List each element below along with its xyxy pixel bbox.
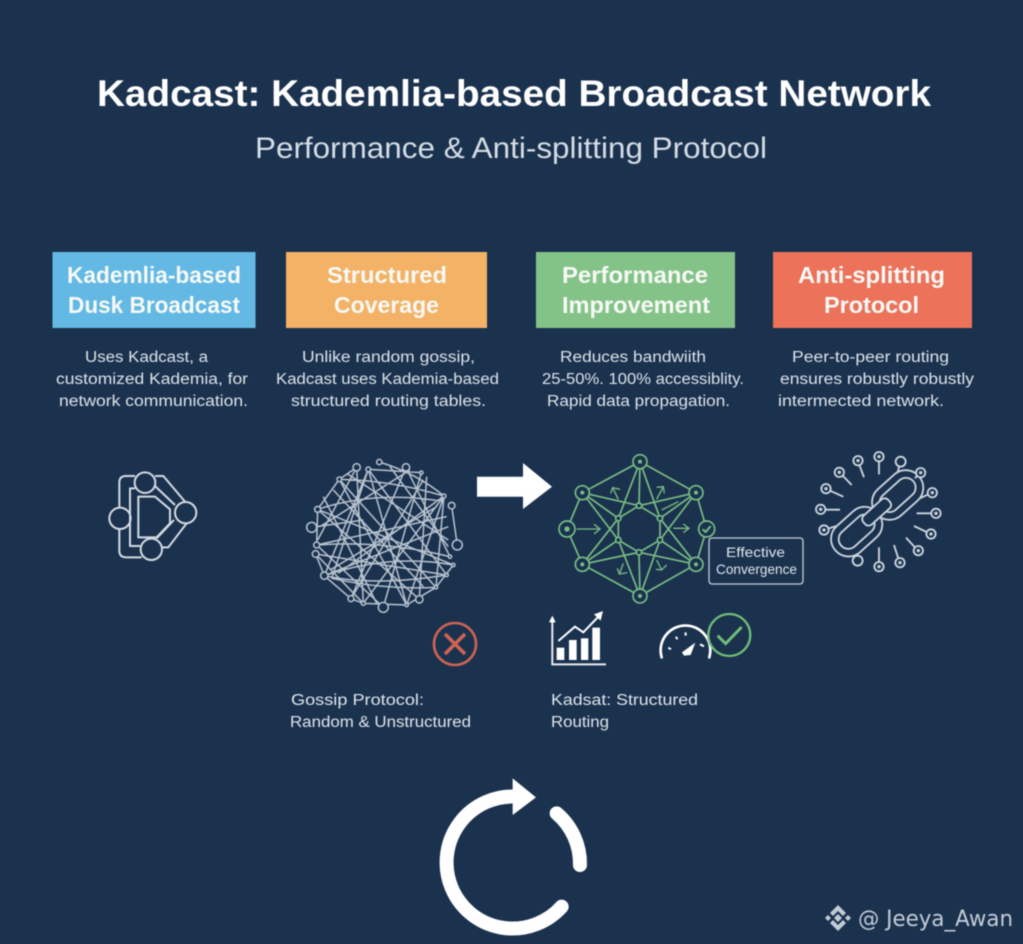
- panel: Structured Coverage: [276, 252, 499, 410]
- description text: Reduces bandwiith: [560, 349, 706, 366]
- label: Kadsat structured routing: Kadsat: Structured: [551, 692, 698, 709]
- description text: Peer-to-peer routing: [792, 349, 949, 366]
- description text: 25-50%. 100% accessiblity.: [542, 371, 744, 388]
- title: Kadcast: Kademlia-based Broadcast Network: [97, 73, 931, 114]
- icon: speed gauge with green check: [661, 614, 750, 657]
- icon: growth bar chart: [549, 611, 606, 664]
- watermark: @ Jeeya_Awan: [858, 907, 1013, 932]
- red heading box: [773, 252, 972, 328]
- panel: Performance Improvement: [536, 252, 744, 410]
- description text: Rapid data propagation.: [547, 393, 730, 410]
- label: gossip protocol: Gossip Protocol:: [291, 692, 424, 709]
- description text: network communication.: [59, 393, 248, 410]
- orange heading box: Structured: [327, 262, 447, 288]
- description text: customized Kademia, for: [56, 371, 248, 388]
- description text: intermected network.: [778, 393, 944, 410]
- green heading box: Performance: [562, 262, 708, 288]
- label: Kadsat structured routing: [551, 692, 698, 731]
- description text: Unlike random gossip,: [302, 349, 475, 366]
- blue heading box: Kademlia-based: [67, 262, 241, 288]
- panel: Kademlia-based Dusk Broadcast: [52, 252, 256, 410]
- icon: red cross: [434, 623, 476, 665]
- icon: structured green network: [559, 455, 715, 603]
- description text: [276, 349, 499, 410]
- callout: Effective Convergence: Effective: [726, 544, 785, 560]
- subtitle: Performance & Anti-splitting Protocol: [255, 132, 767, 165]
- description text: [56, 349, 248, 410]
- icon: gossip random network: [307, 459, 462, 612]
- icon: Kademlia node diagram: [109, 472, 196, 560]
- label: gossip protocol: Random & Unstructured: [290, 714, 471, 731]
- red heading box: Protocol: [824, 292, 919, 318]
- blue heading box: Dusk Broadcast: [68, 292, 240, 318]
- description text: ensures robustly robustly: [780, 371, 974, 388]
- callout: Effective Convergence: [709, 538, 803, 584]
- label: gossip protocol: [290, 692, 471, 731]
- panel: Anti-splitting Protocol: [773, 252, 974, 410]
- description text: Kadcast uses Kademia-based: [276, 371, 499, 388]
- label: Kadsat structured routing: Routing: [551, 714, 609, 731]
- description text: [542, 349, 744, 410]
- orange heading box: [286, 252, 487, 328]
- icon: circular refresh arrow: [447, 778, 580, 929]
- green heading box: Improvement: [562, 292, 710, 318]
- red heading box: Anti-splitting: [798, 262, 945, 288]
- description text: Uses Kadcast, a: [85, 349, 208, 366]
- description text: structured routing tables.: [291, 393, 486, 410]
- green heading box: [536, 252, 735, 328]
- description text: [778, 349, 974, 410]
- orange heading box: Coverage: [334, 292, 439, 318]
- blue heading box: [52, 252, 256, 328]
- arrow: gossip to Kadcast: [477, 463, 552, 509]
- callout: Effective Convergence: Convergence: [716, 561, 797, 577]
- icon: broken chain with pins: [816, 452, 941, 571]
- icon: diamond logo: [825, 905, 851, 931]
